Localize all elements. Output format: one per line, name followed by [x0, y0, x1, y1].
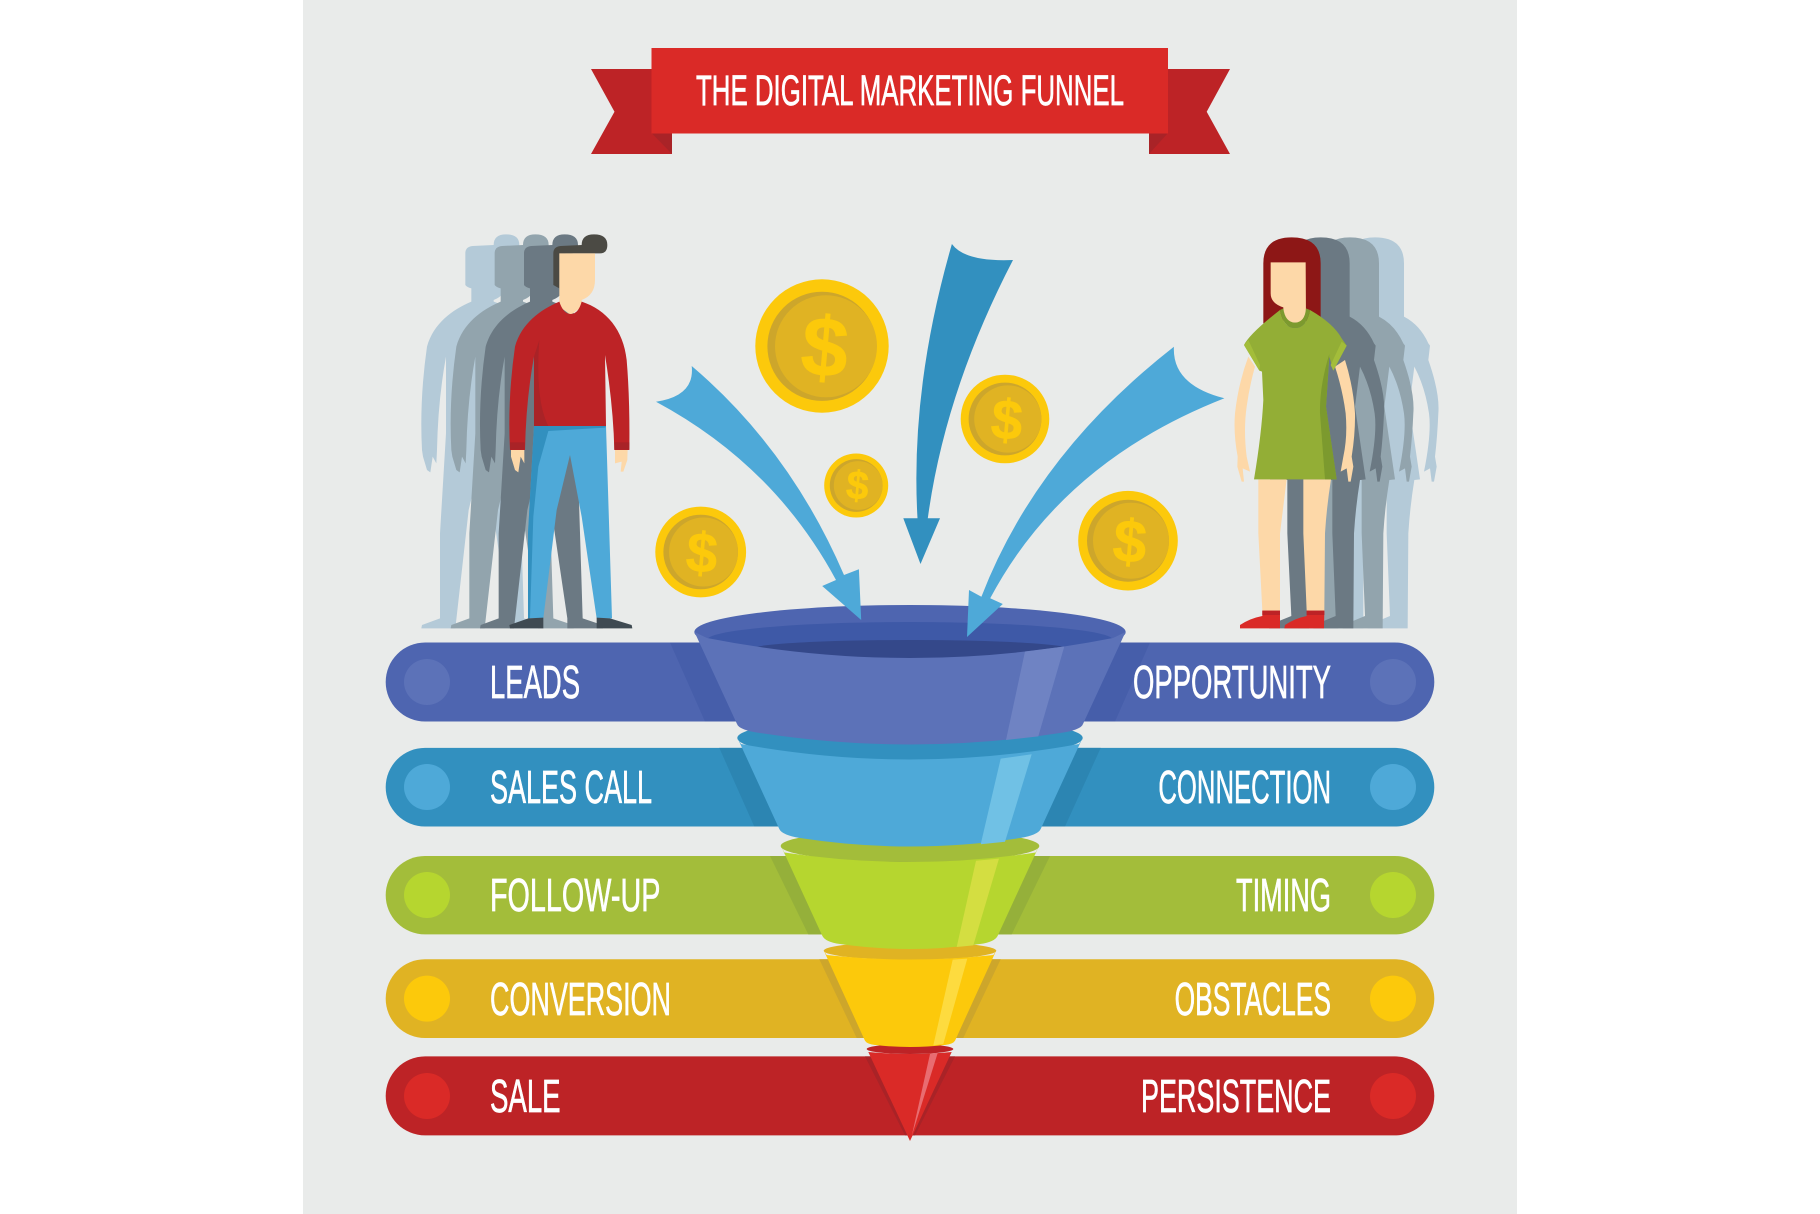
man shoes: [509, 618, 632, 628]
funnel tier 5: red tip: [867, 1044, 953, 1141]
woman figure with shadows: [1235, 237, 1439, 628]
row 5 bar: sale and persistence: [386, 1056, 1434, 1135]
woman shadow medium: [1293, 237, 1414, 628]
man sweater: [509, 302, 629, 450]
man head and neck: [559, 253, 595, 315]
woman dress shading: [1320, 354, 1337, 479]
arrow: center: [903, 244, 1013, 564]
woman shadow light: [1318, 237, 1439, 628]
row 5 right dot: [1370, 1073, 1416, 1119]
funnel tier 1: indigo top: [694, 605, 1126, 744]
row 1 bar: leads and opportunity: [386, 642, 1434, 722]
label: conversion: CONVERSION: [490, 973, 671, 1025]
label: connection: CONNECTION: [1158, 761, 1331, 813]
funnel tier 4: yellow: [824, 942, 996, 1047]
man figure with shadows: [421, 234, 632, 628]
woman right arm: [1335, 360, 1355, 482]
coin large: [755, 279, 889, 413]
coin large: $: [798, 298, 852, 396]
row 5 left dot: [404, 1073, 450, 1119]
coin left: [655, 507, 746, 597]
label: follow-up: FOLLOW-UP: [490, 869, 660, 921]
man sweater shading: [534, 340, 548, 426]
panel: background: [303, 0, 1517, 1214]
row 3 bar: follow-up and timing: [386, 856, 1434, 934]
row 2 bar: sales call and connection: [386, 748, 1434, 826]
label: sales call: SALES CALL: [490, 761, 652, 813]
funnel tier 3: green: [781, 830, 1039, 949]
row 1 left dot: [404, 659, 450, 705]
man trouser shading: [528, 426, 606, 618]
man shadow dark: [480, 234, 603, 628]
banner left tail: [591, 69, 672, 154]
row 4 bar: conversion and obstacles: [386, 959, 1434, 1038]
coin small: [824, 454, 888, 518]
man shadow light: [421, 234, 544, 628]
label: leads: LEADS: [490, 656, 580, 708]
coin right upper: $: [989, 387, 1025, 452]
woman hair: [1263, 237, 1321, 323]
arrow: right: [967, 347, 1224, 637]
banner right fold: [1149, 133, 1168, 154]
banner right tail: [1149, 69, 1230, 154]
row 4 left dot: [404, 976, 450, 1022]
coin right lower: $: [1110, 507, 1149, 576]
label: sale: SALE: [490, 1070, 561, 1122]
banner left fold: [652, 133, 672, 154]
woman shoe tops: [1262, 611, 1324, 615]
row 2 right dot: [1370, 764, 1416, 810]
row 2 left dot: [404, 764, 450, 810]
woman left arm: [1235, 357, 1255, 482]
banner main strip: [652, 48, 1168, 134]
row 4 right dot: [1370, 976, 1416, 1022]
man cuffs: [510, 442, 629, 450]
label: opportunity: OPPORTUNITY: [1133, 656, 1331, 708]
label: persistence: PERSISTENCE: [1141, 1070, 1331, 1122]
label: timing: TIMING: [1236, 869, 1331, 921]
funnel tier 2: light blue: [737, 716, 1083, 846]
woman shadow dark: [1264, 237, 1384, 628]
row 1 right dot: [1370, 659, 1416, 705]
coin small: $: [844, 463, 870, 509]
coin right upper: [961, 375, 1049, 463]
woman dress: [1244, 310, 1347, 479]
title banner: [591, 48, 1230, 154]
title text: THE DIGITAL MARKETING FUNNEL: [696, 67, 1124, 115]
row 3 left dot: [404, 872, 450, 918]
coin left: $: [684, 520, 720, 585]
coin right lower: [1078, 491, 1178, 590]
man shadow medium: [451, 234, 574, 628]
woman collar: [1280, 308, 1310, 328]
funnel: [694, 605, 1126, 1141]
man hands: [511, 448, 628, 472]
woman face and neck: [1271, 262, 1306, 323]
woman sleeves: [1244, 340, 1347, 371]
row 3 right dot: [1370, 872, 1416, 918]
arrow: left: [656, 366, 861, 620]
label: obstacles: OBSTACLES: [1175, 973, 1331, 1025]
man trousers: [528, 426, 612, 618]
woman shoes: [1240, 611, 1324, 628]
woman legs: [1258, 479, 1331, 611]
man hair: [553, 234, 607, 288]
